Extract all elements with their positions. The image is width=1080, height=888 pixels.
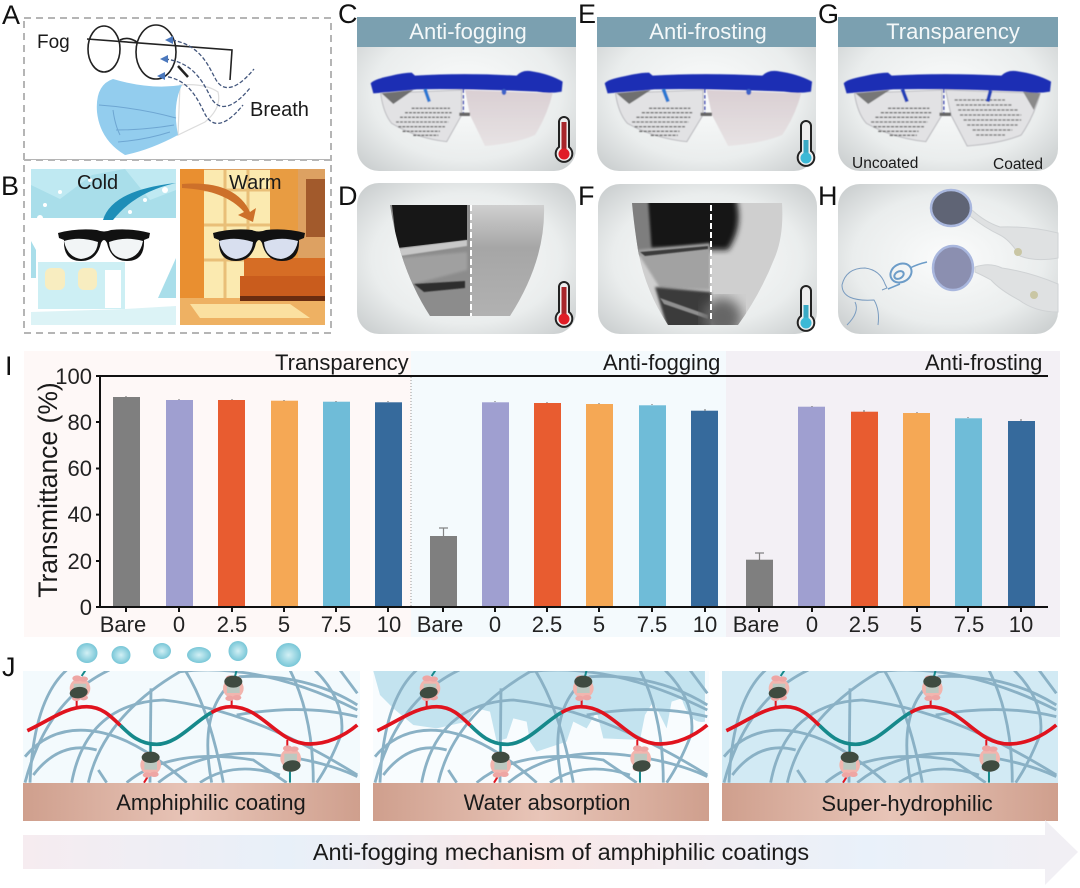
panel A: fog on glasses from breath: [24, 18, 331, 160]
label: Warm: Warm: [229, 172, 282, 194]
illustration: cold scene: [31, 169, 176, 325]
x axis labels: 5: [910, 612, 922, 637]
background G: [838, 17, 1058, 171]
group title: Anti-fogging: Anti-fogging: [603, 350, 720, 375]
icon: fog arrowheads: [157, 36, 173, 80]
panel J1: amphiphilic coating: [23, 670, 360, 821]
x axis labels: 7.5: [954, 612, 984, 637]
x axis labels: 0: [806, 612, 818, 637]
background E: [597, 17, 816, 171]
panel J2: water absorption: [373, 670, 709, 821]
photo: goggles C: [371, 71, 563, 146]
panel F: mask photo cold: [598, 184, 817, 338]
background H: [838, 184, 1058, 334]
illustration: person breathing: [842, 260, 927, 325]
illustration: blue face mask: [97, 79, 219, 155]
error bars: [126, 396, 1021, 560]
icon: cold thermometer E: [798, 121, 814, 166]
icon: hot thermometer D: [556, 282, 572, 327]
x axis labels: 5: [593, 612, 605, 637]
header C: [357, 17, 576, 47]
illustration: warm scene: [180, 169, 325, 325]
letter I: I: [5, 351, 13, 381]
x axis labels: 2.5: [849, 612, 879, 637]
polymer network: [25, 670, 357, 783]
photo: face D: [390, 205, 544, 316]
letter B: B: [1, 171, 19, 201]
label: Breath: Breath: [250, 99, 309, 121]
dashed frame A: [24, 18, 331, 160]
x axis labels: 7.5: [637, 612, 667, 637]
x axis labels: Bare: [417, 612, 463, 637]
y axis tick labels: 0: [80, 595, 92, 620]
polymer network: [724, 670, 1056, 783]
photo: face F: [632, 203, 782, 325]
heading: Transparency: Transparency: [886, 19, 1020, 44]
group divider: [410, 377, 412, 606]
network background: [722, 671, 1058, 783]
group title: Transparency: Transparency: [275, 350, 409, 375]
x axis labels: [100, 612, 1033, 637]
dashed frame B: [24, 160, 331, 333]
photo: goggles E: [605, 71, 812, 146]
letter F: F: [578, 181, 594, 211]
icon: clear glasses: [58, 229, 150, 261]
caption: Amphiphilic coating: Amphiphilic coating: [116, 790, 306, 815]
icon: hot thermometer C: [556, 117, 572, 162]
background D: [357, 183, 576, 334]
background C: [357, 17, 576, 171]
x axis labels: 7.5: [321, 612, 351, 637]
panel G: transparency goggles: [838, 17, 1058, 173]
chart background: [24, 351, 1060, 637]
axes: [96, 376, 1048, 612]
background F: [598, 184, 817, 334]
label: Coated: Coated: [993, 156, 1043, 173]
letter D: D: [338, 181, 358, 211]
panel E: anti-frosting goggles: [597, 17, 816, 171]
panel C: anti-fogging goggles: [357, 17, 576, 171]
bars: anti-frosting: [746, 407, 1035, 607]
x axis labels: 0: [489, 612, 501, 637]
dashed line F: [710, 205, 712, 322]
y axis tick labels: 60: [68, 456, 92, 481]
icon: cold thermometer F: [798, 286, 814, 331]
panel letters: [1, 0, 839, 682]
header G: [838, 17, 1058, 47]
illustration: gloved hands and lenses: [931, 190, 1058, 312]
group title: Anti-frosting: Anti-frosting: [925, 350, 1042, 375]
caption bar: [23, 783, 360, 821]
icon: fogged glasses: [213, 229, 305, 261]
label: Uncoated: Uncoated: [852, 155, 918, 172]
caption: Water absorption: Water absorption: [464, 790, 630, 815]
photo: goggles G: [844, 71, 1051, 146]
y axis tick labels: 20: [68, 549, 92, 574]
letter J: J: [2, 652, 16, 682]
y axis tick labels: [55, 364, 92, 620]
bars: transparency: [113, 397, 402, 607]
y axis title: Transmittance (%): [33, 382, 63, 598]
arrows: breath streams: [162, 40, 254, 123]
y axis tick labels: 40: [68, 502, 92, 527]
arrow: anti-fogging mechanism: [23, 820, 1078, 885]
x axis labels: 10: [377, 612, 401, 637]
label: Cold: Cold: [77, 172, 118, 194]
y axis tick labels: 80: [68, 410, 92, 435]
x axis labels: Bare: [733, 612, 779, 637]
illustration: round glasses: [87, 25, 232, 80]
arrow caption: Anti-fogging mechanism of amphiphilic coatings: [313, 839, 809, 865]
letter A: A: [2, 0, 20, 30]
panel H: breath on lens demo: [838, 184, 1058, 334]
arrow shape: [23, 820, 1078, 885]
x axis labels: 5: [278, 612, 290, 637]
bar chart I: transmittance: [24, 350, 1060, 637]
x axis labels: 2.5: [532, 612, 562, 637]
letter H: H: [818, 181, 838, 211]
polymer network: [375, 670, 707, 783]
x axis labels: 2.5: [217, 612, 247, 637]
water layer: [373, 671, 709, 783]
network background: [23, 671, 360, 783]
label: Fog: Fog: [37, 32, 70, 53]
header E: [597, 17, 816, 47]
caption: Super-hydrophilic: Super-hydrophilic: [821, 791, 993, 816]
panel D: mask photo warm: [357, 183, 576, 334]
y axis tick labels: 100: [55, 364, 92, 389]
panel B: cold to warm scene: [24, 160, 331, 333]
heading: Anti-fogging: Anti-fogging: [409, 19, 527, 44]
heading: Anti-frosting: Anti-frosting: [649, 19, 767, 44]
x axis labels: 10: [693, 612, 717, 637]
icon: water droplets: [76, 641, 301, 667]
bars: anti-fogging: [430, 402, 718, 607]
caption bar: [373, 783, 709, 821]
panel J3: super-hydrophilic: [722, 670, 1058, 821]
x axis labels: 0: [173, 612, 185, 637]
caption bar: [722, 783, 1058, 821]
x axis labels: Bare: [100, 612, 146, 637]
x axis labels: 10: [1009, 612, 1033, 637]
dashed line D: [470, 205, 472, 316]
